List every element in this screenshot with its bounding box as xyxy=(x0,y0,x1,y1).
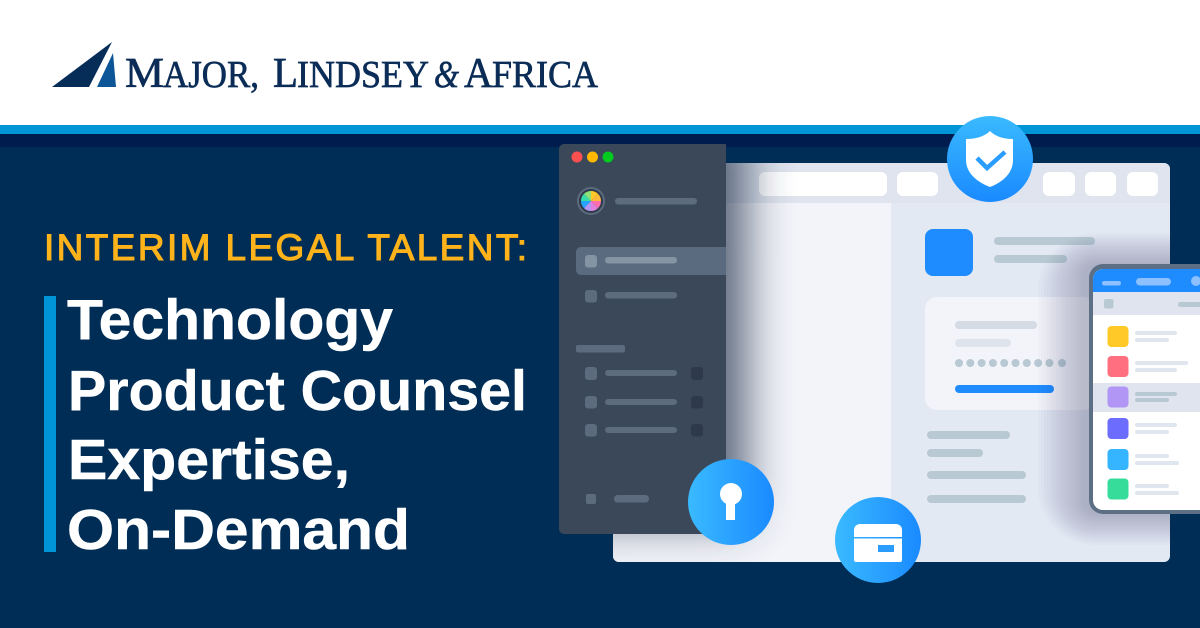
phone header xyxy=(1093,269,1200,292)
phone shadow on window xyxy=(1044,237,1170,541)
main heading: On-Demand xyxy=(67,498,410,562)
content header xyxy=(925,229,1095,276)
logo wordmark: INDSEY xyxy=(297,54,429,96)
main heading: Expertise, xyxy=(68,428,350,492)
main heading: Technology xyxy=(67,288,393,352)
menu item xyxy=(585,290,677,302)
phone xyxy=(1089,264,1200,514)
window toolbar xyxy=(759,163,1170,196)
payment card panel xyxy=(925,297,1095,410)
icon: keyhole badge xyxy=(688,459,774,545)
phone list lines xyxy=(1135,331,1188,495)
sidebar footer xyxy=(586,494,649,504)
window controls xyxy=(572,152,614,162)
icon: credit card badge xyxy=(835,497,921,583)
menu list xyxy=(585,367,703,436)
phone app icons xyxy=(1108,326,1128,500)
menu section heading xyxy=(576,345,625,352)
account name line xyxy=(615,198,697,204)
accent bar xyxy=(44,296,56,552)
logo wordmark: A xyxy=(464,51,494,97)
logo wordmark: L xyxy=(273,51,298,97)
app window xyxy=(613,163,1170,562)
logo wordmark: & xyxy=(434,54,459,96)
logo wordmark: FRICA xyxy=(492,54,599,96)
phone subheader xyxy=(1093,292,1200,315)
sidebar xyxy=(559,144,726,534)
active menu item xyxy=(576,247,726,275)
logo wordmark xyxy=(125,51,599,97)
content text lines xyxy=(927,431,1026,503)
header band xyxy=(0,0,1200,147)
avatar xyxy=(577,187,605,215)
logo wordmark: AJOR, xyxy=(163,54,259,96)
phone highlighted row xyxy=(1093,383,1200,412)
logo wordmark: M xyxy=(125,51,164,97)
main heading xyxy=(67,288,527,562)
window left pane xyxy=(613,203,891,562)
icon: shield badge xyxy=(947,116,1033,202)
logo mark xyxy=(52,42,116,87)
main heading: Product Counsel xyxy=(68,359,527,423)
kicker heading: INTERIM LEGAL TALENT: xyxy=(44,227,527,268)
logo: Major, Lindsey & Africa xyxy=(52,42,599,97)
sidebar shadow on window xyxy=(613,163,783,559)
